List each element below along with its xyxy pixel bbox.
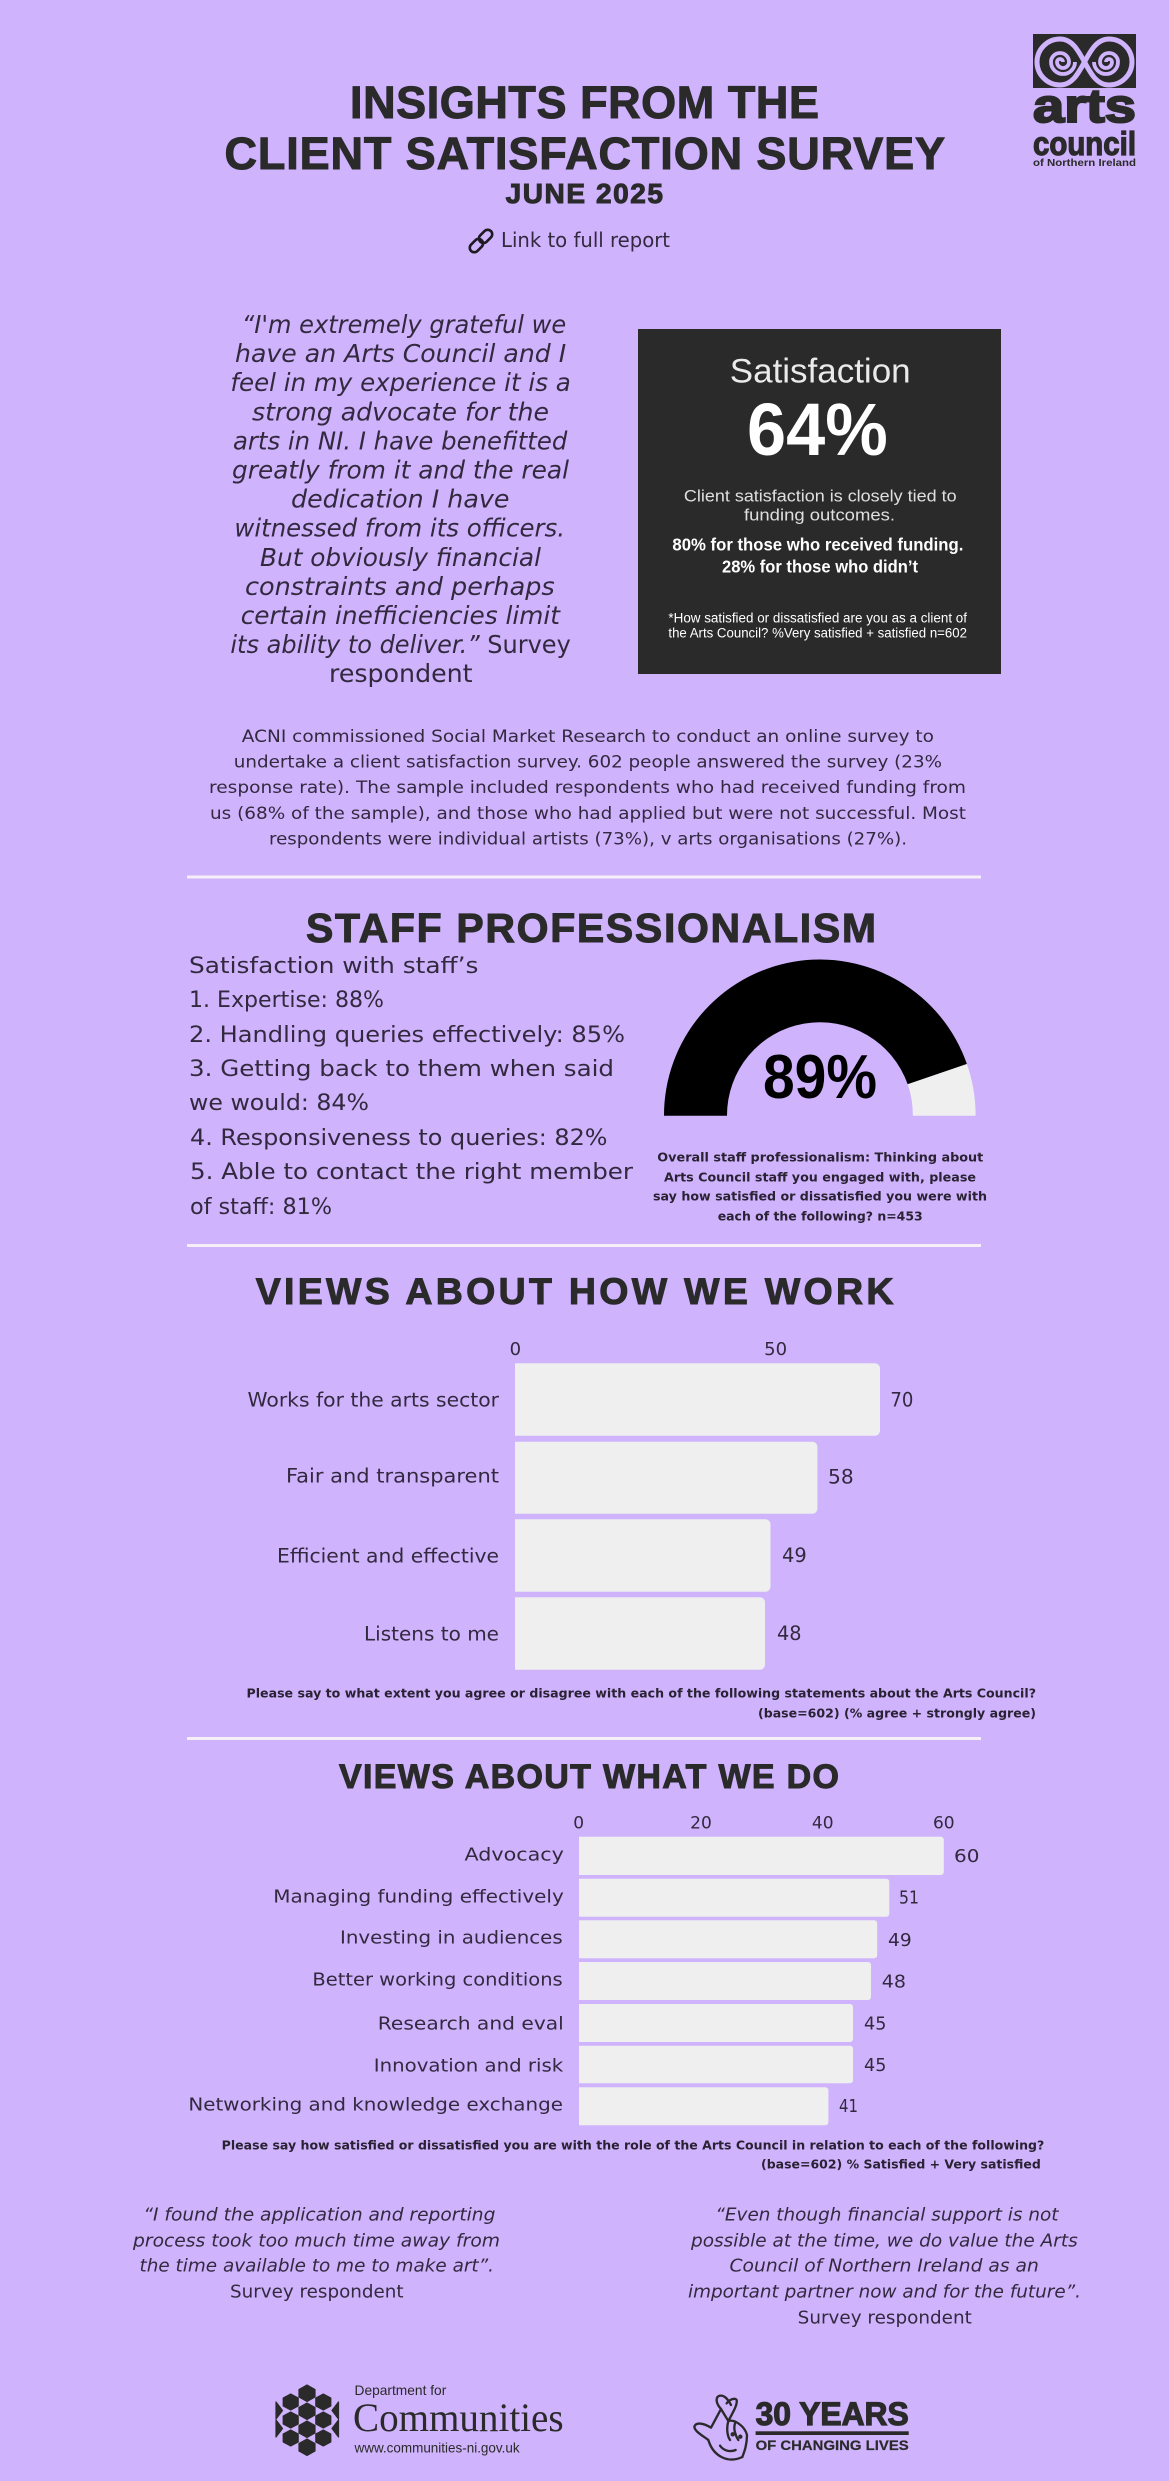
gauge caption: each of the following? n=453 — [718, 1209, 923, 1224]
staff satisfaction list: 5. Able to contact the right member — [190, 1160, 634, 1185]
panel footnote — [668, 611, 967, 641]
logo: Arts Council of Northern Ireland — [1033, 34, 1136, 169]
quote: respondent: witnessed from its officers. — [234, 514, 565, 543]
gauge caption: say how satisfied or dissatisfied you were with — [653, 1189, 987, 1204]
staff satisfaction list: we would: 84% — [189, 1091, 369, 1116]
quote: financial support: important partner now and for the future”. — [688, 2282, 1081, 2303]
bar: investing in audiences: 49 — [888, 1931, 912, 1951]
quote: respondent: its ability to deliver.” Survey — [230, 630, 571, 659]
quote: application and reporting: “I found the application and reporting — [143, 2205, 495, 2226]
gauge chart: 89% — [664, 960, 976, 1116]
bar chart: how we work — [248, 1339, 913, 1670]
staff satisfaction list: 2. Handling queries effectively: 85% — [189, 1023, 625, 1048]
title — [224, 77, 945, 179]
chart axis: 0 — [573, 1813, 584, 1833]
chart footnote: how we work — [246, 1686, 1036, 1721]
panel heading: Satisfaction — [730, 353, 911, 391]
staff satisfaction list: 4. Responsiveness to queries: 82% — [190, 1126, 608, 1151]
bar: works for the arts sector: Works for the arts sector — [248, 1389, 500, 1412]
quote: application and reporting — [132, 2205, 500, 2303]
icon: hexagon cluster — [276, 2385, 338, 2456]
bar: research and eval: 45 — [864, 2014, 886, 2034]
panel footnote: *How satisfied or dissatisfied are you as a client of — [668, 611, 967, 626]
quote: financial support: Survey respondent — [798, 2308, 972, 2329]
bar: investing in audiences — [340, 1920, 912, 1958]
bar chart: what we do — [188, 1813, 979, 2125]
funding outcomes breakdown — [672, 535, 963, 577]
quote: respondent: greatly from it and the real — [232, 456, 569, 484]
quote: respondent: feel in my experience it is a — [230, 368, 571, 397]
quote: application and reporting: Survey respondent — [230, 2282, 404, 2303]
quote: respondent: strong advocate for the — [252, 397, 549, 426]
logo: National Lottery 30 years: 30 YEARS — [756, 2396, 909, 2432]
intro paragraph: undertake a client satisfaction survey. 602 people answered the survey (23% — [234, 753, 942, 773]
heading: views about how we work: VIEWS ABOUT HOW WE WORK — [256, 1270, 893, 1312]
quote: financial support: Council of Northern Ireland as an — [730, 2256, 1039, 2277]
bar: innovation and risk — [374, 2046, 886, 2083]
bar: listens to me: Listens to me — [364, 1623, 499, 1646]
title: INSIGHTS FROM THE — [350, 77, 819, 128]
logo: National Lottery 30 years — [694, 2396, 909, 2459]
logo: Arts Council of Northern Ireland: arts — [1033, 79, 1136, 132]
logo: Department for Communities: Communities — [353, 2395, 564, 2440]
chart footnote: how we work: (base=602) (% agree + strongly agree) — [758, 1706, 1036, 1721]
quote: respondent: dedication I have — [291, 485, 509, 514]
bar: advocacy — [464, 1837, 979, 1875]
chart axis: 0 — [510, 1339, 521, 1360]
bar: fair and transparent: Fair and transparent — [286, 1465, 499, 1488]
chart axis: 60 — [933, 1813, 955, 1833]
bar: efficient and effective: Efficient and effective — [277, 1545, 499, 1568]
gauge chart: 89%: 89% — [763, 1043, 877, 1112]
bar: fair and transparent — [286, 1442, 854, 1514]
chart axis — [510, 1339, 787, 1360]
quote: respondent: But obviously financial — [260, 543, 541, 572]
bar: research and eval — [378, 2004, 886, 2042]
logo: Arts Council of Northern Ireland: of Northern Ireland — [1033, 157, 1136, 169]
bar: works for the arts sector — [248, 1363, 913, 1436]
chart footnote: how we work: Please say to what extent you agree or disagree with each of the following statements about the Arts Council? — [246, 1686, 1036, 1701]
bar: networking and knowledge exchange: Networking and knowledge exchange — [188, 2095, 563, 2116]
gauge caption: Arts Council staff you engaged with, please — [664, 1170, 976, 1185]
bar: managing funding effectively — [273, 1879, 919, 1917]
quote: financial support: “Even though financial support is not — [715, 2205, 1059, 2226]
gauge caption — [653, 1150, 987, 1224]
title: CLIENT SATISFACTION SURVEY — [224, 128, 945, 179]
quote: application and reporting: process took too much time away from — [132, 2231, 500, 2252]
intro paragraph: ACNI commissioned Social Market Research to conduct an online survey to — [242, 727, 934, 747]
quote: respondent — [230, 310, 571, 688]
panel body text: funding outcomes. — [744, 506, 895, 525]
funding outcomes breakdown: 28% for those who didn’t — [722, 557, 918, 577]
staff satisfaction list: Satisfaction with staff’s — [189, 954, 478, 979]
icon: chain link — [468, 228, 494, 254]
link to full report: Link to full report — [501, 228, 670, 252]
panel footnote: the Arts Council? %Very satisfied + satisfied n=602 — [668, 626, 967, 641]
chart axis: 20 — [690, 1813, 712, 1833]
bar: better working conditions: 48 — [882, 1972, 906, 1992]
icon: crossed fingers hand — [694, 2396, 747, 2459]
bar: better working conditions: Better working conditions — [312, 1970, 563, 1991]
logo: Department for Communities: www.communities-ni.gov.uk — [354, 2440, 521, 2456]
heading: staff professionalism: STAFF PROFESSIONALISM — [306, 905, 876, 951]
bar: managing funding effectively: Managing funding effectively — [273, 1887, 564, 1908]
big number: 64%: 64% — [747, 388, 888, 471]
quote: respondent: certain inefficiencies limit — [241, 601, 561, 630]
funding outcomes breakdown: 80% for those who received funding. — [672, 535, 963, 555]
chart footnote: what we do — [222, 2137, 1044, 2171]
quote: respondent: constraints and perhaps — [245, 572, 555, 601]
chart axis: 50 — [764, 1339, 787, 1360]
bar: research and eval: Research and eval — [378, 2013, 564, 2034]
bar: networking and knowledge exchange — [188, 2087, 858, 2125]
bar: efficient and effective: 49 — [782, 1544, 807, 1567]
bar: fair and transparent: 58 — [828, 1466, 854, 1488]
bar: efficient and effective — [277, 1519, 807, 1592]
logo: Department for Communities — [276, 2382, 564, 2456]
bar: advocacy: Advocacy — [464, 1845, 564, 1866]
intro paragraph: us (68% of the sample), and those who had applied but were not successful. Most — [210, 804, 966, 824]
chart footnote: what we do: Please say how satisfied or dissatisfied you are with the role of the Arts Council in relation to each of the following? — [222, 2137, 1044, 2152]
logo: National Lottery 30 years: OF CHANGING LIVES — [756, 2438, 909, 2453]
bar: innovation and risk: 45 — [864, 2056, 886, 2076]
bar: advocacy: 60 — [954, 1847, 979, 1867]
bar: innovation and risk: Innovation and risk — [374, 2056, 564, 2077]
quote: respondent: “I'm extremely grateful we — [242, 310, 566, 339]
bar: better working conditions — [312, 1962, 906, 2000]
gauge caption: Overall staff professionalism: Thinking about — [657, 1150, 983, 1165]
quote: financial support: possible at the time, we do value the Arts — [690, 2231, 1078, 2252]
chart axis: 40 — [812, 1813, 834, 1833]
bar: listens to me — [364, 1597, 802, 1670]
staff satisfaction list: 3. Getting back to them when said — [189, 1057, 614, 1082]
bar: investing in audiences: Investing in audiences — [340, 1928, 563, 1949]
intro paragraph — [209, 727, 966, 849]
quote: financial support — [688, 2205, 1081, 2329]
intro paragraph: response rate). The sample included respondents who had received funding from — [209, 778, 966, 798]
quote: respondent: arts in NI. I have benefitted — [233, 426, 567, 455]
chart footnote: what we do: (base=602) % Satisfied + Very satisfied — [761, 2156, 1041, 2171]
bar: listens to me: 48 — [777, 1622, 802, 1645]
heading: views about what we do: VIEWS ABOUT WHAT WE DO — [339, 1758, 839, 1796]
intro paragraph: respondents were individual artists (73%), v arts organisations (27%). — [269, 829, 907, 849]
panel body text — [684, 487, 957, 525]
bar: works for the arts sector: 70 — [890, 1389, 913, 1412]
bar: managing funding effectively: 51 — [899, 1889, 919, 1909]
staff satisfaction list — [189, 954, 634, 1220]
panel: satisfaction — [638, 329, 1001, 674]
subtitle: date: JUNE 2025 — [506, 178, 663, 209]
quote: respondent: respondent — [329, 659, 473, 688]
logo: Department for Communities: Department for — [354, 2382, 447, 2398]
chart axis — [573, 1813, 955, 1833]
staff satisfaction list: 1. Expertise: 88% — [189, 988, 384, 1013]
staff satisfaction list: of staff: 81% — [190, 1195, 332, 1220]
logo: Arts Council of Northern Ireland: council — [1033, 125, 1136, 162]
quote: respondent: have an Arts Council and I — [235, 339, 566, 368]
quote: application and reporting: the time available to me to make art”. — [140, 2256, 494, 2277]
bar: networking and knowledge exchange: 41 — [839, 2097, 858, 2117]
panel body text: Client satisfaction is closely tied to — [684, 487, 957, 506]
